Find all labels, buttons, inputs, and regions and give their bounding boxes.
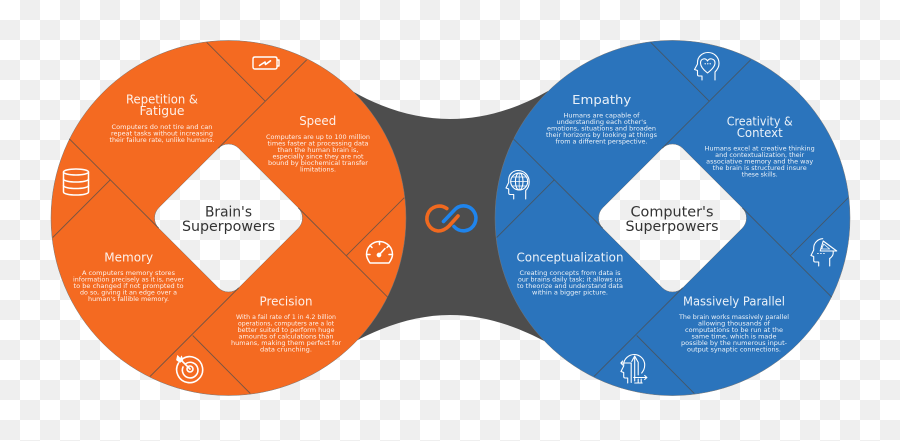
text block: Massively Parallel: The brain works massively parallel (678, 314, 789, 321)
text block: Repetition & Fatigue: their failure rate, unlike humans. (110, 137, 215, 144)
text block: Precision: operations, computers are a lot (238, 320, 335, 328)
logo orange strand (427, 206, 458, 231)
text block: Conceptualization: Creating concepts from data is (520, 270, 620, 277)
icon: head with globe (506, 170, 529, 199)
text block: Empathy (546, 92, 657, 146)
icon: head with parallel arrows (621, 354, 647, 383)
icon: infinity logo (427, 206, 476, 231)
text block: Massively Parallel: output synaptic connections. (687, 346, 781, 354)
icon: head with geometric triangle (811, 239, 837, 266)
text block: Creativity & Context: associative memory and the way (706, 159, 814, 166)
text block: Memory: do so, giving it an edge over a (80, 290, 177, 296)
text block: Massively Parallel: allowing thousands of (698, 320, 771, 328)
heading: Computer's Superpowers (626, 204, 718, 235)
text block: Speed: bound by biochemical transfer (268, 160, 369, 167)
text block: Repetition & Fatigue (110, 92, 215, 144)
text block: Creativity & Context: and contextualization, their (715, 152, 805, 159)
text block: Massively Parallel: possible by the numerous input- (681, 340, 787, 347)
text block: Empathy: Empathy (572, 92, 632, 107)
text block: Creativity & Context: Creativity & (727, 113, 793, 128)
panel: brain's superpowers circle (51, 40, 406, 395)
text block: Massively Parallel: same time, which is made (692, 334, 777, 340)
text block: Creativity & Context: Humans excel at creative thinking (705, 146, 815, 153)
text block: Precision: data crunching. (260, 346, 312, 354)
text block: Creativity & Context: these skills. (742, 172, 778, 179)
text block: Conceptualization: our brains daily task; it allows us (518, 276, 622, 284)
text block: Memory: Memory (104, 250, 154, 265)
text block: Memory: to be changed if not prompted to (74, 283, 184, 290)
text block: Precision: better suited to perform huge (238, 327, 335, 334)
dark connector shape (352, 91, 548, 343)
text block: Speed: especially since they are not (272, 154, 364, 160)
icon: head with heart (694, 52, 719, 80)
text block: Memory (73, 250, 185, 303)
text block: Conceptualization (516, 250, 624, 296)
text block: Speed: Speed (299, 113, 336, 128)
text block: Empathy: emotions, situations and broaden (547, 126, 656, 133)
heading: Computer's Superpowers: Computer's (630, 204, 714, 220)
text block: Speed (266, 113, 370, 174)
text block: Creativity & Context: the brain is structured insure (713, 165, 807, 172)
heading: Brain's Superpowers (182, 204, 275, 235)
icon: target with arrow (176, 356, 203, 383)
icon: database (64, 169, 88, 195)
text block: Repetition & Fatigue: Computers do not tire and can (112, 124, 213, 131)
heading: Brain's Superpowers: Superpowers (182, 219, 275, 235)
text block: Speed: Computers are up to 100 million (266, 134, 370, 141)
text block: Empathy: understanding each other's (556, 119, 646, 126)
panel: computer's superpowers circle (495, 40, 850, 396)
text block: Massively Parallel: computations to be run at the (685, 327, 783, 334)
text block: Memory: information precisely as it is, never (73, 276, 185, 284)
orange ring (51, 40, 406, 395)
logo blue strand (444, 206, 476, 231)
text block: Creativity & Context: Context (737, 125, 783, 140)
text block: Creativity & Context (705, 113, 815, 179)
text block: Precision: Precision (260, 294, 312, 309)
text block: Conceptualization: Conceptualization (516, 250, 624, 265)
text block: Conceptualization: within a bigger picture. (532, 290, 608, 296)
text block: Repetition & Fatigue: Repetition & (126, 92, 198, 106)
text block: Speed: than the human brain is, (278, 147, 359, 154)
blue ring (495, 40, 850, 396)
text block: Memory: A computers memory stores (82, 270, 175, 277)
text block: Precision: humans, making them perfect for (231, 340, 342, 347)
text block: Empathy: from a different perspective. (556, 139, 648, 146)
icon: battery (253, 57, 279, 69)
text block: Massively Parallel (678, 294, 789, 354)
text block: Memory: human's fallible memory. (88, 296, 169, 303)
text block: Massively Parallel: Massively Parallel (683, 294, 785, 309)
text block: Empathy: Humans are capable of (564, 113, 640, 120)
text block: Precision: amounts of calculations than (238, 334, 334, 340)
text block: Conceptualization: to theorize and understand data (517, 283, 623, 290)
text block: Empathy: their horizons by looking at things (546, 132, 657, 139)
heading: Brain's Superpowers: Brain's (205, 204, 252, 220)
text block: Speed: times faster at processing data (268, 140, 369, 148)
heading: Computer's Superpowers: Superpowers (626, 219, 718, 235)
text block: Repetition & Fatigue: repeat tasks without increasing (111, 130, 213, 137)
text block: Precision (231, 294, 342, 354)
text block: Repetition & Fatigue: Fatigue (140, 103, 185, 118)
text block: Precision: With a fail rate of 1 in 4.2 billion (236, 314, 336, 321)
text block: Speed: limitations. (300, 166, 336, 174)
icon: speedometer gauge (366, 242, 392, 263)
